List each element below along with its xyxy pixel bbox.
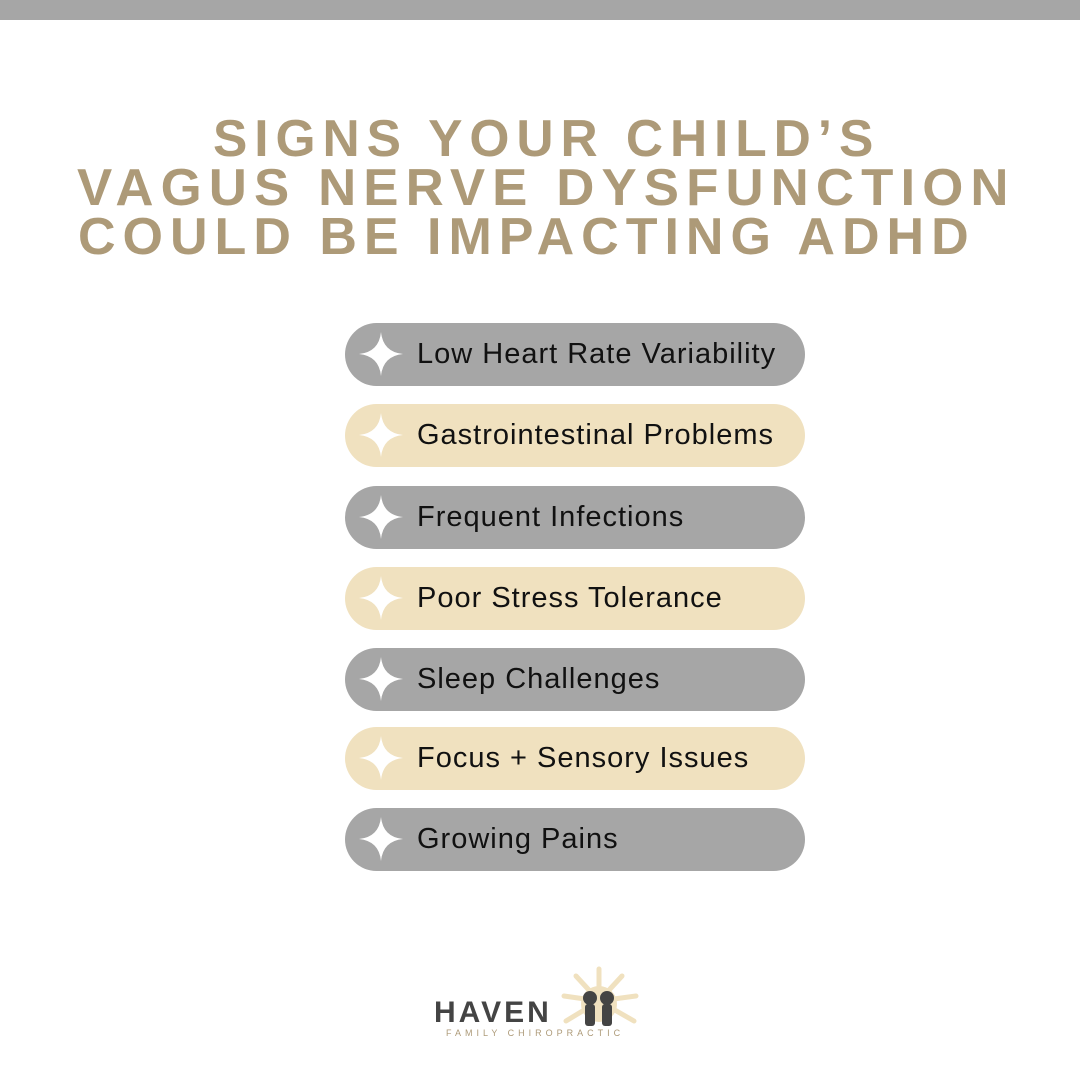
logo: FAMILY CHIROPRACTIC	[446, 1028, 624, 1038]
icon: sun with kids	[562, 966, 638, 1026]
pill: Focus + Sensory Issues: Focus + Sensory Issues	[417, 742, 749, 774]
text: SIGNS YOUR CHILD’S	[213, 110, 880, 168]
pill: Low Heart Rate Variability: Low Heart Rate Variability	[417, 338, 776, 370]
pill: Low Heart Rate Variability	[345, 323, 805, 386]
pill: Growing Pains	[345, 808, 805, 871]
text: COULD BE IMPACTING ADHD	[78, 208, 976, 266]
title	[77, 110, 1016, 266]
logo text: HAVEN	[434, 996, 552, 1029]
pill: Gastrointestinal Problems: Gastrointestinal Problems	[417, 419, 774, 451]
pill: Focus + Sensory Issues	[345, 727, 805, 790]
logo	[434, 966, 638, 1038]
pill: Poor Stress Tolerance	[345, 567, 805, 630]
pill: Growing Pains: Growing Pains	[417, 823, 619, 855]
pill: Frequent Infections	[345, 486, 805, 549]
pill: Frequent Infections: Frequent Infections	[417, 501, 684, 533]
pill: Gastrointestinal Problems	[345, 404, 805, 467]
pill: Sleep Challenges: Sleep Challenges	[417, 663, 660, 695]
pill: Sleep Challenges	[345, 648, 805, 711]
text: VAGUS NERVE DYSFUNCTION	[77, 159, 1016, 217]
pill: Poor Stress Tolerance: Poor Stress Tolerance	[417, 582, 723, 614]
